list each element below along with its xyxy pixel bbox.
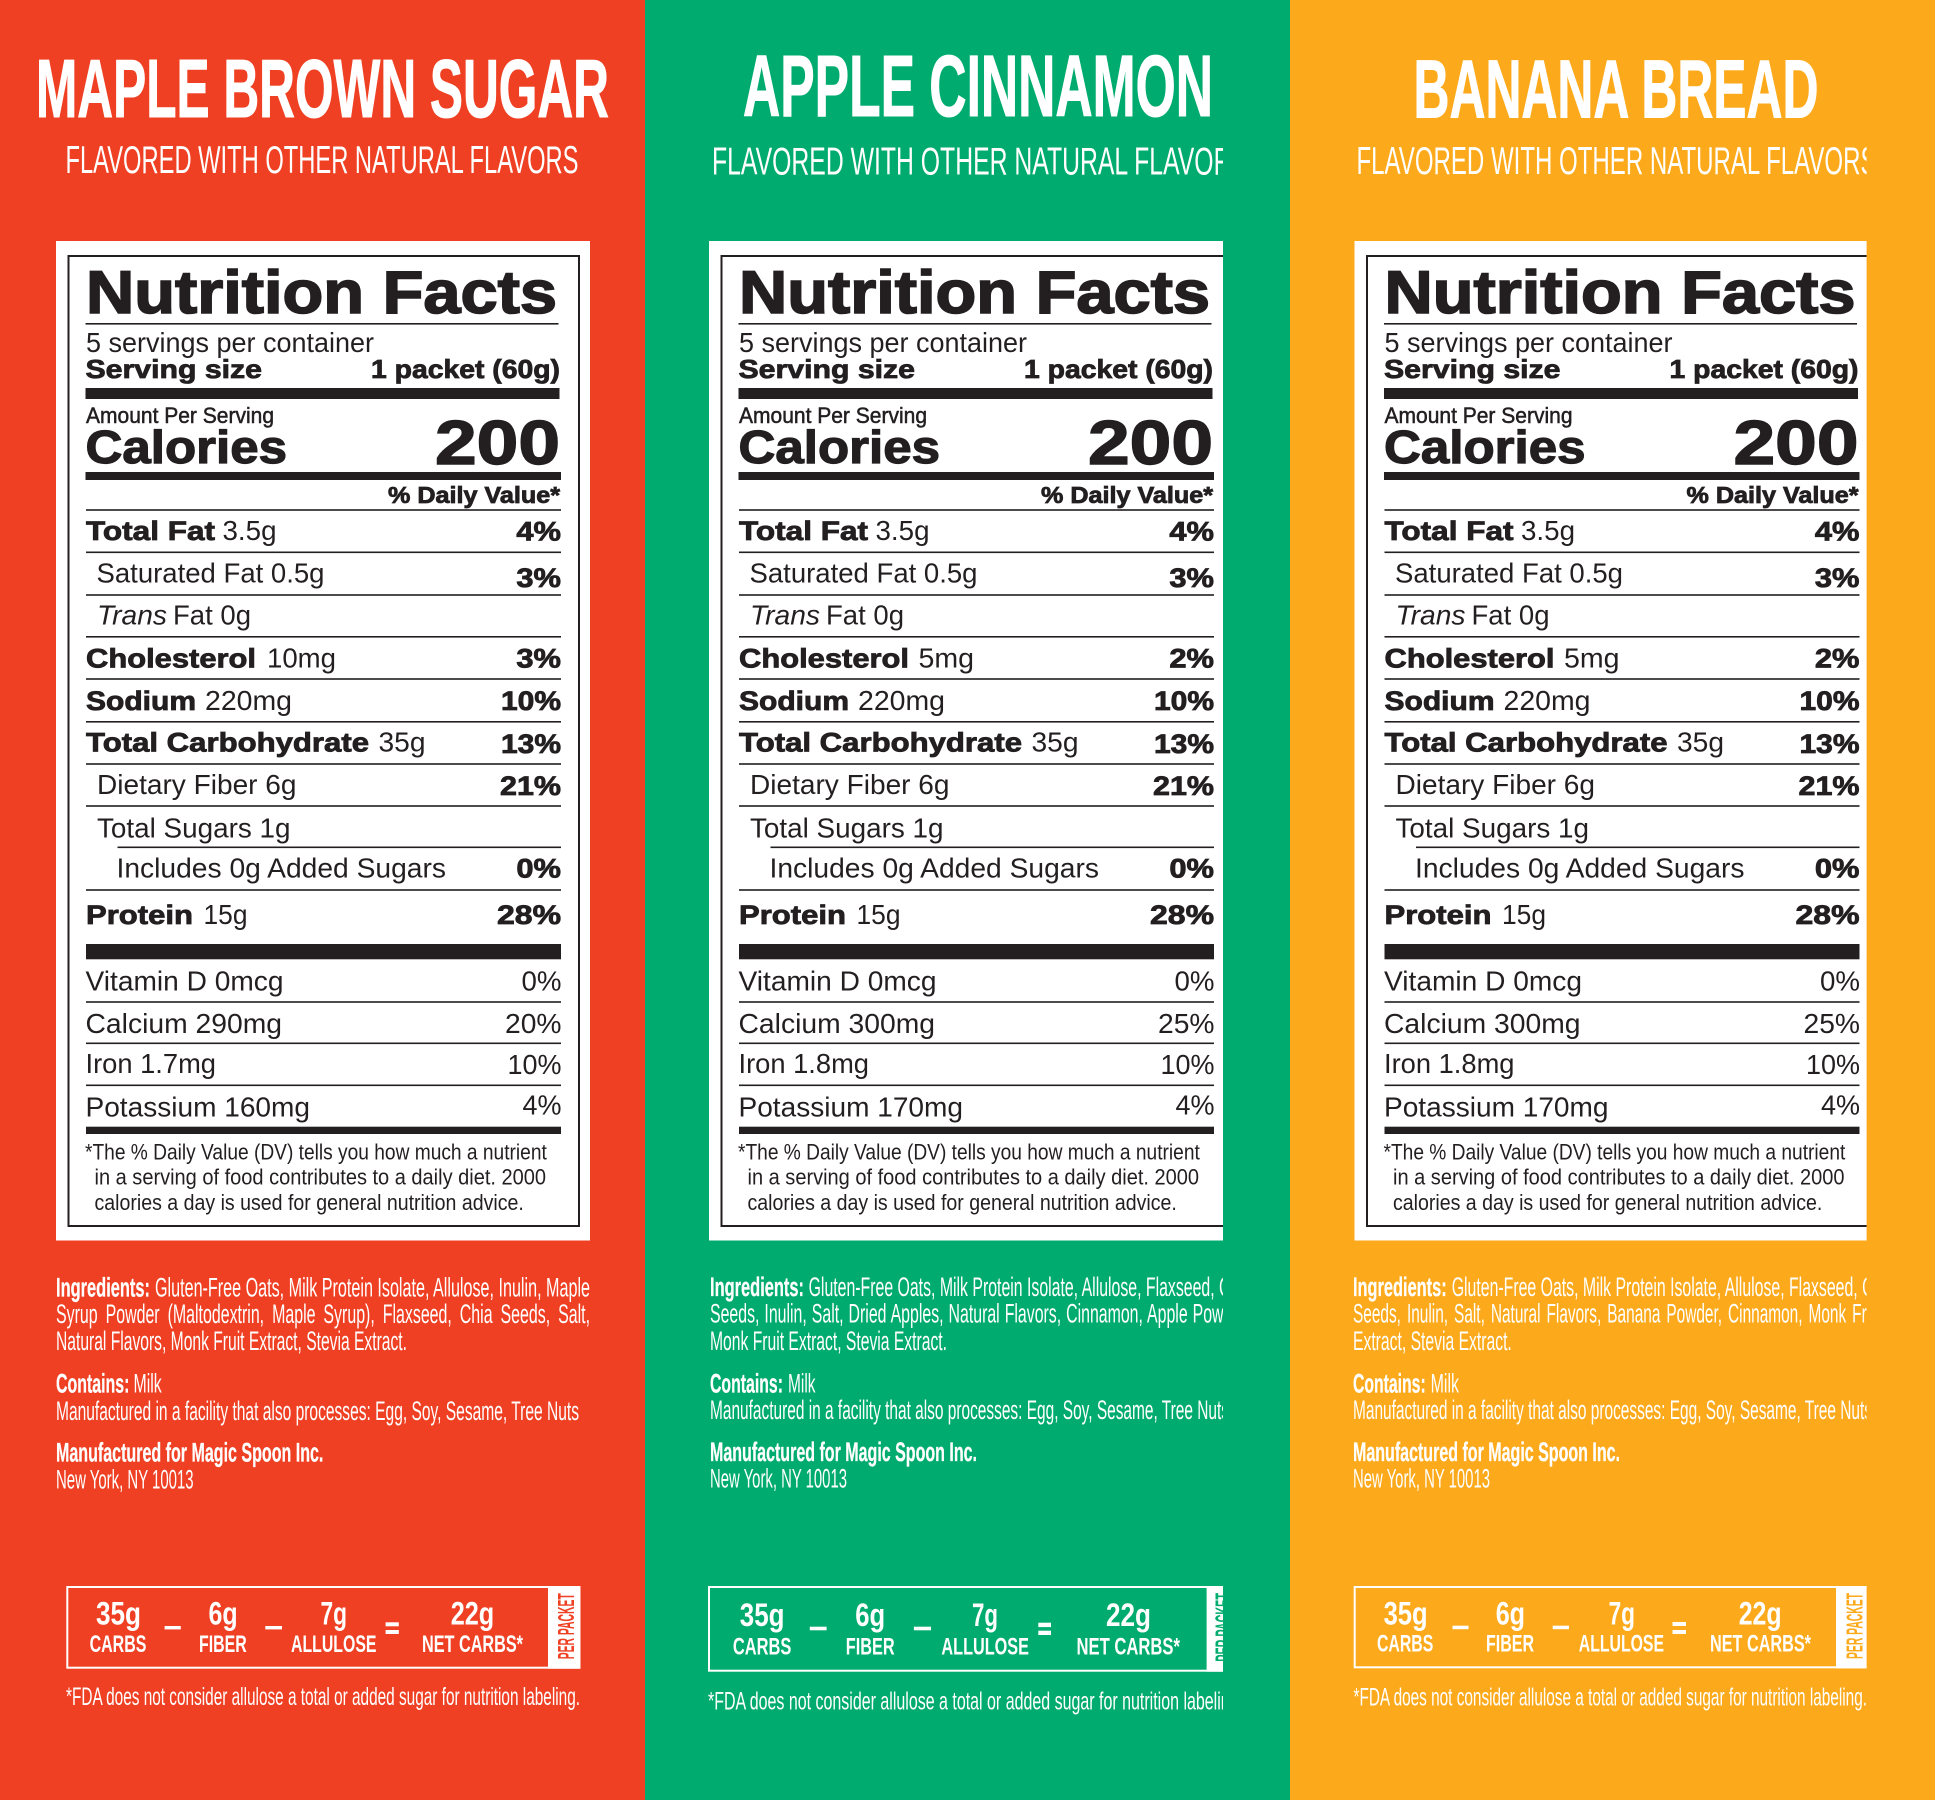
servings block: 5 servings per container	[86, 327, 374, 358]
row: added sugars: 0%	[1169, 853, 1214, 883]
allulose value	[291, 1595, 376, 1658]
fiber value: FIBER	[846, 1633, 895, 1660]
row: calcium: Calcium 300mg	[1384, 1008, 1580, 1039]
row: total carbohydrate: 35g	[1677, 727, 1724, 758]
allulose value: ALLULOSE	[1579, 1631, 1664, 1658]
row: dietary fiber	[752, 774, 1214, 800]
allergen statement: Manufactured in a facility that also processes: Egg, Soy, Sesame, Tree Nuts	[56, 1396, 579, 1426]
row: potassium: Potassium 170mg	[1384, 1092, 1608, 1123]
row: dietary fiber: 21%	[1153, 771, 1214, 801]
ingredients: Syrup Powder (Maltodextrin, Maple Syrup), Flaxseed, Chia Seeds, Salt,	[56, 1299, 590, 1329]
subtitle: FLAVORED WITH OTHER NATURAL FLAVORS	[712, 140, 1248, 183]
row: dietary fiber: Dietary Fiber 6g	[97, 769, 296, 800]
row: total carbohydrate: 35g	[378, 727, 426, 758]
manufacturer: Manufactured for Magic Spoon Inc.	[710, 1437, 977, 1467]
row: trans fat: Fat 0g	[173, 600, 251, 631]
row: vitamin d: Vitamin D 0mcg	[86, 966, 284, 997]
row: total fat: 4%	[516, 517, 561, 547]
row: iron	[741, 1054, 1214, 1079]
row: potassium: Potassium 170mg	[738, 1092, 963, 1123]
daily value header: % Daily Value*	[1041, 482, 1213, 508]
allergen statement: Milk	[134, 1369, 162, 1399]
daily value footnote: in a serving of food contributes to a daily diet. 2000	[748, 1164, 1199, 1189]
calories block: Calories	[86, 421, 287, 473]
ingredients: Ingredients:	[710, 1272, 804, 1302]
daily value header: % Daily Value*	[388, 482, 560, 508]
row: sodium: 10%	[1800, 686, 1860, 716]
row: potassium	[1384, 1089, 1860, 1123]
row: saturated fat	[750, 562, 1214, 588]
row: protein	[1384, 899, 1860, 930]
row: dietary fiber: Dietary Fiber 6g	[750, 769, 950, 800]
manufacturer	[710, 1441, 976, 1491]
row: total carbohydrate: Total Carbohydrate	[739, 728, 1022, 758]
row: total carbohydrate	[86, 727, 561, 759]
clipped content: PER PACKET	[1842, 1593, 1868, 1659]
heading: nutrition facts: Nutrition Facts	[1384, 259, 1856, 326]
calories block	[738, 406, 1211, 466]
row: trans fat: Trans	[750, 600, 820, 631]
servings block: 1 packet (60g)	[1024, 354, 1213, 384]
carbs value: 35g	[740, 1597, 784, 1633]
daily value footnote: in a serving of food contributes to a daily diet. 2000	[94, 1164, 546, 1189]
row: potassium	[740, 1095, 1214, 1122]
allulose value	[942, 1604, 1028, 1654]
row: total sugars: Total Sugars 1g	[1396, 812, 1589, 843]
panel background: red	[0, 0, 645, 1800]
heading: nutrition facts: Nutrition Facts	[86, 259, 557, 326]
fiber value: 6g	[1496, 1595, 1525, 1631]
row: potassium: Potassium 160mg	[86, 1092, 310, 1123]
row: saturated fat: Saturated Fat 0.5g	[750, 558, 978, 589]
row: total carbohydrate: 13%	[1154, 729, 1214, 759]
calories block: 200	[1734, 409, 1858, 478]
net carbs value	[1078, 1603, 1180, 1654]
servings block	[738, 327, 1213, 384]
calories block: Calories	[1384, 421, 1586, 473]
row: protein: Protein	[1384, 900, 1492, 930]
net carbs equation box	[709, 1586, 1240, 1672]
panel: maple brown sugar	[0, 0, 645, 1800]
daily value footnote	[1384, 1139, 1846, 1215]
net carbs value: 22g	[1739, 1595, 1782, 1631]
row: protein: Protein	[86, 900, 193, 930]
row: cholesterol: 3%	[516, 644, 561, 674]
row: total carbohydrate	[738, 732, 1214, 758]
ingredients: Gluten-Free Oats, Milk Protein Isolate, Allulose, Inulin, Maple	[155, 1273, 590, 1303]
net carbs equation box	[67, 1586, 580, 1669]
fiber value: 6g	[208, 1595, 238, 1631]
row: cholesterol: Cholesterol	[739, 644, 909, 674]
row: total fat	[1384, 515, 1860, 547]
servings block: 5 servings per container	[739, 327, 1027, 358]
row: iron: Iron 1.8mg	[1384, 1048, 1514, 1079]
row: cholesterol: 5mg	[1564, 643, 1620, 674]
row: protein	[740, 904, 1214, 930]
allergen statement: Contains:	[1353, 1368, 1426, 1398]
servings block: 1 packet (60g)	[371, 354, 560, 384]
row: total carbohydrate: Total Carbohydrate	[1384, 728, 1668, 758]
fiber value: FIBER	[1486, 1631, 1534, 1658]
row: cholesterol	[86, 643, 561, 674]
servings block	[1384, 327, 1858, 384]
row: iron: 10%	[1806, 1049, 1860, 1080]
calories block: Amount Per Serving	[739, 403, 927, 428]
allulose value: 7g	[1609, 1595, 1635, 1631]
row: calcium	[1384, 1008, 1860, 1039]
heading: nutrition facts: Nutrition Facts	[739, 259, 1210, 326]
row: added sugars: Includes 0g Added Sugars	[770, 852, 1099, 883]
manufacturer: Manufactured for Magic Spoon Inc.	[56, 1438, 323, 1468]
row: cholesterol	[1384, 643, 1860, 674]
row: vitamin d	[1384, 966, 1860, 997]
calories block: Amount Per Serving	[86, 403, 274, 428]
ingredients: Natural Flavors, Monk Fruit Extract, Stevia Extract.	[56, 1326, 407, 1356]
allergen statement	[1353, 1368, 1872, 1425]
daily value footnote: calories a day is used for general nutrition advice.	[94, 1190, 524, 1215]
carbs value: CARBS	[90, 1631, 146, 1658]
row: added sugars: Includes 0g Added Sugars	[116, 852, 446, 883]
row: protein: 28%	[1150, 900, 1214, 930]
row: cholesterol: 10mg	[267, 643, 336, 674]
row: potassium: 4%	[1821, 1089, 1860, 1120]
row: dietary fiber	[1396, 769, 1860, 801]
row: dietary fiber: 21%	[1798, 771, 1860, 801]
row: potassium: 4%	[522, 1089, 562, 1120]
daily value footnote: in a serving of food contributes to a daily diet. 2000	[1393, 1164, 1844, 1189]
row: cholesterol: 2%	[1169, 644, 1214, 674]
row: sodium	[1384, 685, 1860, 716]
net carbs value	[422, 1595, 523, 1658]
carbs value	[734, 1603, 791, 1654]
calories block	[1384, 406, 1856, 466]
allergen statement	[710, 1368, 1229, 1425]
carbs value: 35g	[96, 1595, 141, 1631]
manufacturer	[1353, 1437, 1620, 1494]
servings block: Serving size	[86, 354, 262, 384]
title: maple brown sugar: MAPLE BROWN SUGAR	[36, 42, 609, 135]
calories block: Amount Per Serving	[1384, 403, 1572, 428]
row: total carbohydrate: 35g	[1032, 727, 1078, 758]
fiber value: 6g	[855, 1597, 885, 1633]
ingredients: Ingredients:	[56, 1273, 150, 1303]
ingredients	[56, 1273, 590, 1356]
carbs value	[1377, 1595, 1433, 1658]
panel background: green	[645, 0, 1290, 1800]
row: protein: 15g	[204, 899, 248, 930]
row: trans fat: Fat 0g	[826, 600, 904, 631]
row: protein: 15g	[856, 899, 900, 930]
row: total fat	[86, 515, 561, 547]
row: vitamin d: 0%	[522, 966, 562, 997]
title: apple cinnamon: APPLE CINNAMON	[743, 38, 1213, 135]
panel: banana bread	[1290, 0, 1935, 1800]
row: vitamin d: Vitamin D 0mcg	[738, 966, 936, 997]
row: total sugars: Total Sugars 1g	[97, 812, 290, 843]
fda footnote: *FDA does not consider allulose a total or added sugar for nutrition labeling.	[66, 1683, 580, 1711]
allulose value: 7g	[972, 1597, 998, 1633]
daily value footnote	[738, 1139, 1200, 1215]
allergen statement	[56, 1369, 579, 1426]
row: protein: 28%	[1796, 900, 1860, 930]
manufacturer: Manufactured for Magic Spoon Inc.	[1353, 1437, 1620, 1467]
row: cholesterol: Cholesterol	[86, 644, 256, 674]
nutrition facts label	[1354, 241, 1888, 1240]
row: total carbohydrate	[1384, 727, 1860, 759]
net carbs value: NET CARBS*	[422, 1631, 523, 1658]
daily value footnote: calories a day is used for general nutrition advice.	[1393, 1190, 1822, 1215]
net carbs value: NET CARBS*	[1710, 1631, 1811, 1658]
row: sodium: 220mg	[858, 685, 945, 716]
row: trans fat	[97, 600, 251, 631]
row: total carbohydrate: Total Carbohydrate	[86, 728, 369, 758]
allulose value: ALLULOSE	[291, 1631, 376, 1658]
row: total fat: 3.5g	[876, 515, 930, 546]
fiber value	[846, 1603, 894, 1654]
net carbs equation box	[1355, 1586, 1885, 1668]
clipped content	[1353, 140, 1895, 1712]
row: vitamin d: 0%	[1174, 966, 1214, 997]
row: potassium	[86, 1089, 562, 1123]
manufacturer: New York, NY 10013	[710, 1464, 847, 1494]
daily value footnote	[85, 1139, 547, 1215]
nutrition facts label	[56, 241, 590, 1240]
subtitle: FLAVORED WITH OTHER NATURAL FLAVORS	[66, 139, 578, 182]
daily value footnote: calories a day is used for general nutrition advice.	[748, 1190, 1177, 1215]
servings block: 1 packet (60g)	[1670, 354, 1858, 384]
row: saturated fat: Saturated Fat 0.5g	[96, 558, 324, 589]
ingredients: Seeds, Inulin, Salt, Dried Apples, Natural Flavors, Cinnamon, Apple Powder,	[710, 1299, 1250, 1329]
panel: apple cinnamon	[645, 0, 1290, 1800]
servings block: Serving size	[738, 354, 915, 384]
row: trans fat: Trans	[97, 600, 167, 631]
servings block: Serving size	[1384, 354, 1560, 384]
servings block: 5 servings per container	[1384, 327, 1672, 358]
clipped content	[708, 140, 1252, 1715]
row: trans fat	[1396, 600, 1550, 631]
manufacturer: New York, NY 10013	[1353, 1464, 1490, 1494]
allergen statement: Manufactured in a facility that also processes: Egg, Soy, Sesame, Tree Nuts	[710, 1395, 1229, 1425]
row: total fat: Total Fat	[1384, 516, 1514, 546]
row: vitamin d: 0%	[1820, 966, 1860, 997]
row: added sugars: 0%	[1815, 853, 1860, 883]
ingredients	[710, 1276, 1223, 1354]
net carbs value: NET CARBS*	[1076, 1633, 1180, 1660]
ingredients: Monk Fruit Extract, Stevia Extract.	[710, 1326, 947, 1356]
carbs value: CARBS	[733, 1633, 791, 1660]
calories block: 200	[1088, 409, 1213, 478]
row: saturated fat: 3%	[516, 563, 561, 593]
row: protein: 15g	[1502, 899, 1546, 930]
row: sodium: 10%	[1154, 686, 1214, 716]
net carbs value: 22g	[1106, 1597, 1151, 1633]
row: total fat	[738, 520, 1214, 546]
row: sodium: Sodium	[86, 686, 196, 716]
row: iron	[1384, 1048, 1860, 1080]
row: saturated fat: 3%	[1169, 563, 1214, 593]
servings block	[86, 327, 560, 384]
row: trans fat	[752, 605, 902, 630]
row: sodium	[739, 690, 1214, 716]
allulose value: 7g	[320, 1595, 347, 1631]
row: calcium: 25%	[1158, 1008, 1214, 1039]
row: added sugars: Includes 0g Added Sugars	[1415, 852, 1744, 883]
manufacturer	[56, 1438, 323, 1494]
manufacturer: New York, NY 10013	[56, 1464, 194, 1494]
net carbs value	[1710, 1595, 1811, 1658]
row: sodium: 220mg	[1504, 685, 1590, 716]
row: saturated fat: Saturated Fat 0.5g	[1395, 558, 1623, 589]
row: total fat: Total Fat	[86, 516, 215, 546]
row: sodium	[86, 685, 561, 716]
row: vitamin d: Vitamin D 0mcg	[1384, 966, 1582, 997]
row: sodium: 220mg	[205, 685, 292, 716]
row: total fat: 3.5g	[1521, 515, 1575, 546]
row: sodium: Sodium	[739, 686, 849, 716]
allulose value	[1579, 1595, 1664, 1658]
row: iron: 10%	[1160, 1049, 1214, 1080]
row: iron: Iron 1.7mg	[86, 1048, 216, 1079]
row: cholesterol	[740, 648, 1214, 674]
allergen statement: Contains:	[710, 1368, 783, 1398]
row: total sugars: Total Sugars 1g	[750, 812, 944, 843]
row: saturated fat: 3%	[1815, 563, 1860, 593]
panel background: orange	[1290, 0, 1935, 1800]
row: total fat: Total Fat	[739, 516, 868, 546]
row: calcium: 20%	[505, 1008, 562, 1039]
row: calcium	[740, 1013, 1214, 1039]
row: calcium: 25%	[1804, 1008, 1860, 1039]
carbs value: 35g	[1384, 1595, 1428, 1631]
daily value footnote: *The % Daily Value (DV) tells you how much a nutrient	[1384, 1139, 1846, 1164]
nutrition facts label	[709, 241, 1243, 1240]
row: dietary fiber: Dietary Fiber 6g	[1396, 769, 1595, 800]
net carbs equation box: PER PACKET	[553, 1593, 579, 1659]
net carbs value: 22g	[451, 1595, 494, 1631]
calories block: 200	[435, 409, 560, 478]
row: dietary fiber: 21%	[500, 771, 561, 801]
row: trans fat: Fat 0g	[1472, 600, 1550, 631]
row: calcium	[86, 1008, 562, 1039]
row: cholesterol: 2%	[1815, 644, 1860, 674]
allergen statement: Milk	[1431, 1368, 1459, 1398]
row: total fat: 4%	[1815, 517, 1860, 547]
row: potassium: 4%	[1176, 1089, 1214, 1120]
row: dietary fiber	[97, 769, 561, 801]
row: calcium: Calcium 290mg	[86, 1008, 282, 1039]
row: protein	[86, 899, 561, 930]
daily value footnote: *The % Daily Value (DV) tells you how much a nutrient	[85, 1139, 547, 1164]
row: sodium: Sodium	[1384, 686, 1494, 716]
fiber value: FIBER	[199, 1631, 247, 1658]
allergen statement: Contains:	[56, 1369, 129, 1399]
ingredients: Gluten-Free Oats, Milk Protein Isolate, Allulose, Flaxseed, Chia	[809, 1272, 1252, 1302]
clipped content: PER PACKET	[1211, 1593, 1238, 1662]
ingredients	[1353, 1272, 1895, 1356]
row: sodium: 10%	[501, 686, 561, 716]
row: vitamin d	[738, 970, 1214, 996]
ingredients: Ingredients:	[1353, 1272, 1447, 1302]
daily value footnote: *The % Daily Value (DV) tells you how much a nutrient	[738, 1139, 1200, 1164]
fiber value	[199, 1595, 247, 1658]
carbs value	[90, 1595, 146, 1658]
fiber value	[1486, 1595, 1534, 1658]
row: added sugars: 0%	[516, 853, 561, 883]
row: total carbohydrate: 13%	[501, 729, 561, 759]
row: iron: Iron 1.8mg	[738, 1048, 869, 1079]
daily value header: % Daily Value*	[1686, 482, 1859, 508]
row: saturated fat	[1395, 558, 1860, 593]
row: iron: 10%	[508, 1049, 562, 1080]
calories block: Calories	[738, 421, 940, 473]
row: cholesterol: 5mg	[918, 643, 974, 674]
fda footnote: *FDA does not consider allulose a total or added sugar for nutrition labeling.	[708, 1687, 1243, 1715]
row: cholesterol: Cholesterol	[1384, 644, 1554, 674]
row: added sugars	[772, 858, 1214, 884]
row: protein: Protein	[739, 900, 846, 930]
allergen statement: Milk	[788, 1368, 816, 1398]
allulose value: ALLULOSE	[941, 1633, 1029, 1660]
row: total carbohydrate: 13%	[1800, 729, 1860, 759]
row: calcium: Calcium 300mg	[738, 1008, 935, 1039]
row: trans fat: Trans	[1396, 600, 1466, 631]
row: total fat: 3.5g	[222, 515, 276, 546]
carbs value: CARBS	[1377, 1631, 1433, 1658]
row: protein: 28%	[497, 900, 561, 930]
calories block	[86, 403, 560, 478]
row: total fat: 4%	[1169, 517, 1214, 547]
row: vitamin d	[86, 966, 562, 997]
row: saturated fat	[96, 558, 561, 593]
ingredients: Extract, Stevia Extract.	[1353, 1326, 1512, 1356]
row: iron	[86, 1048, 562, 1080]
